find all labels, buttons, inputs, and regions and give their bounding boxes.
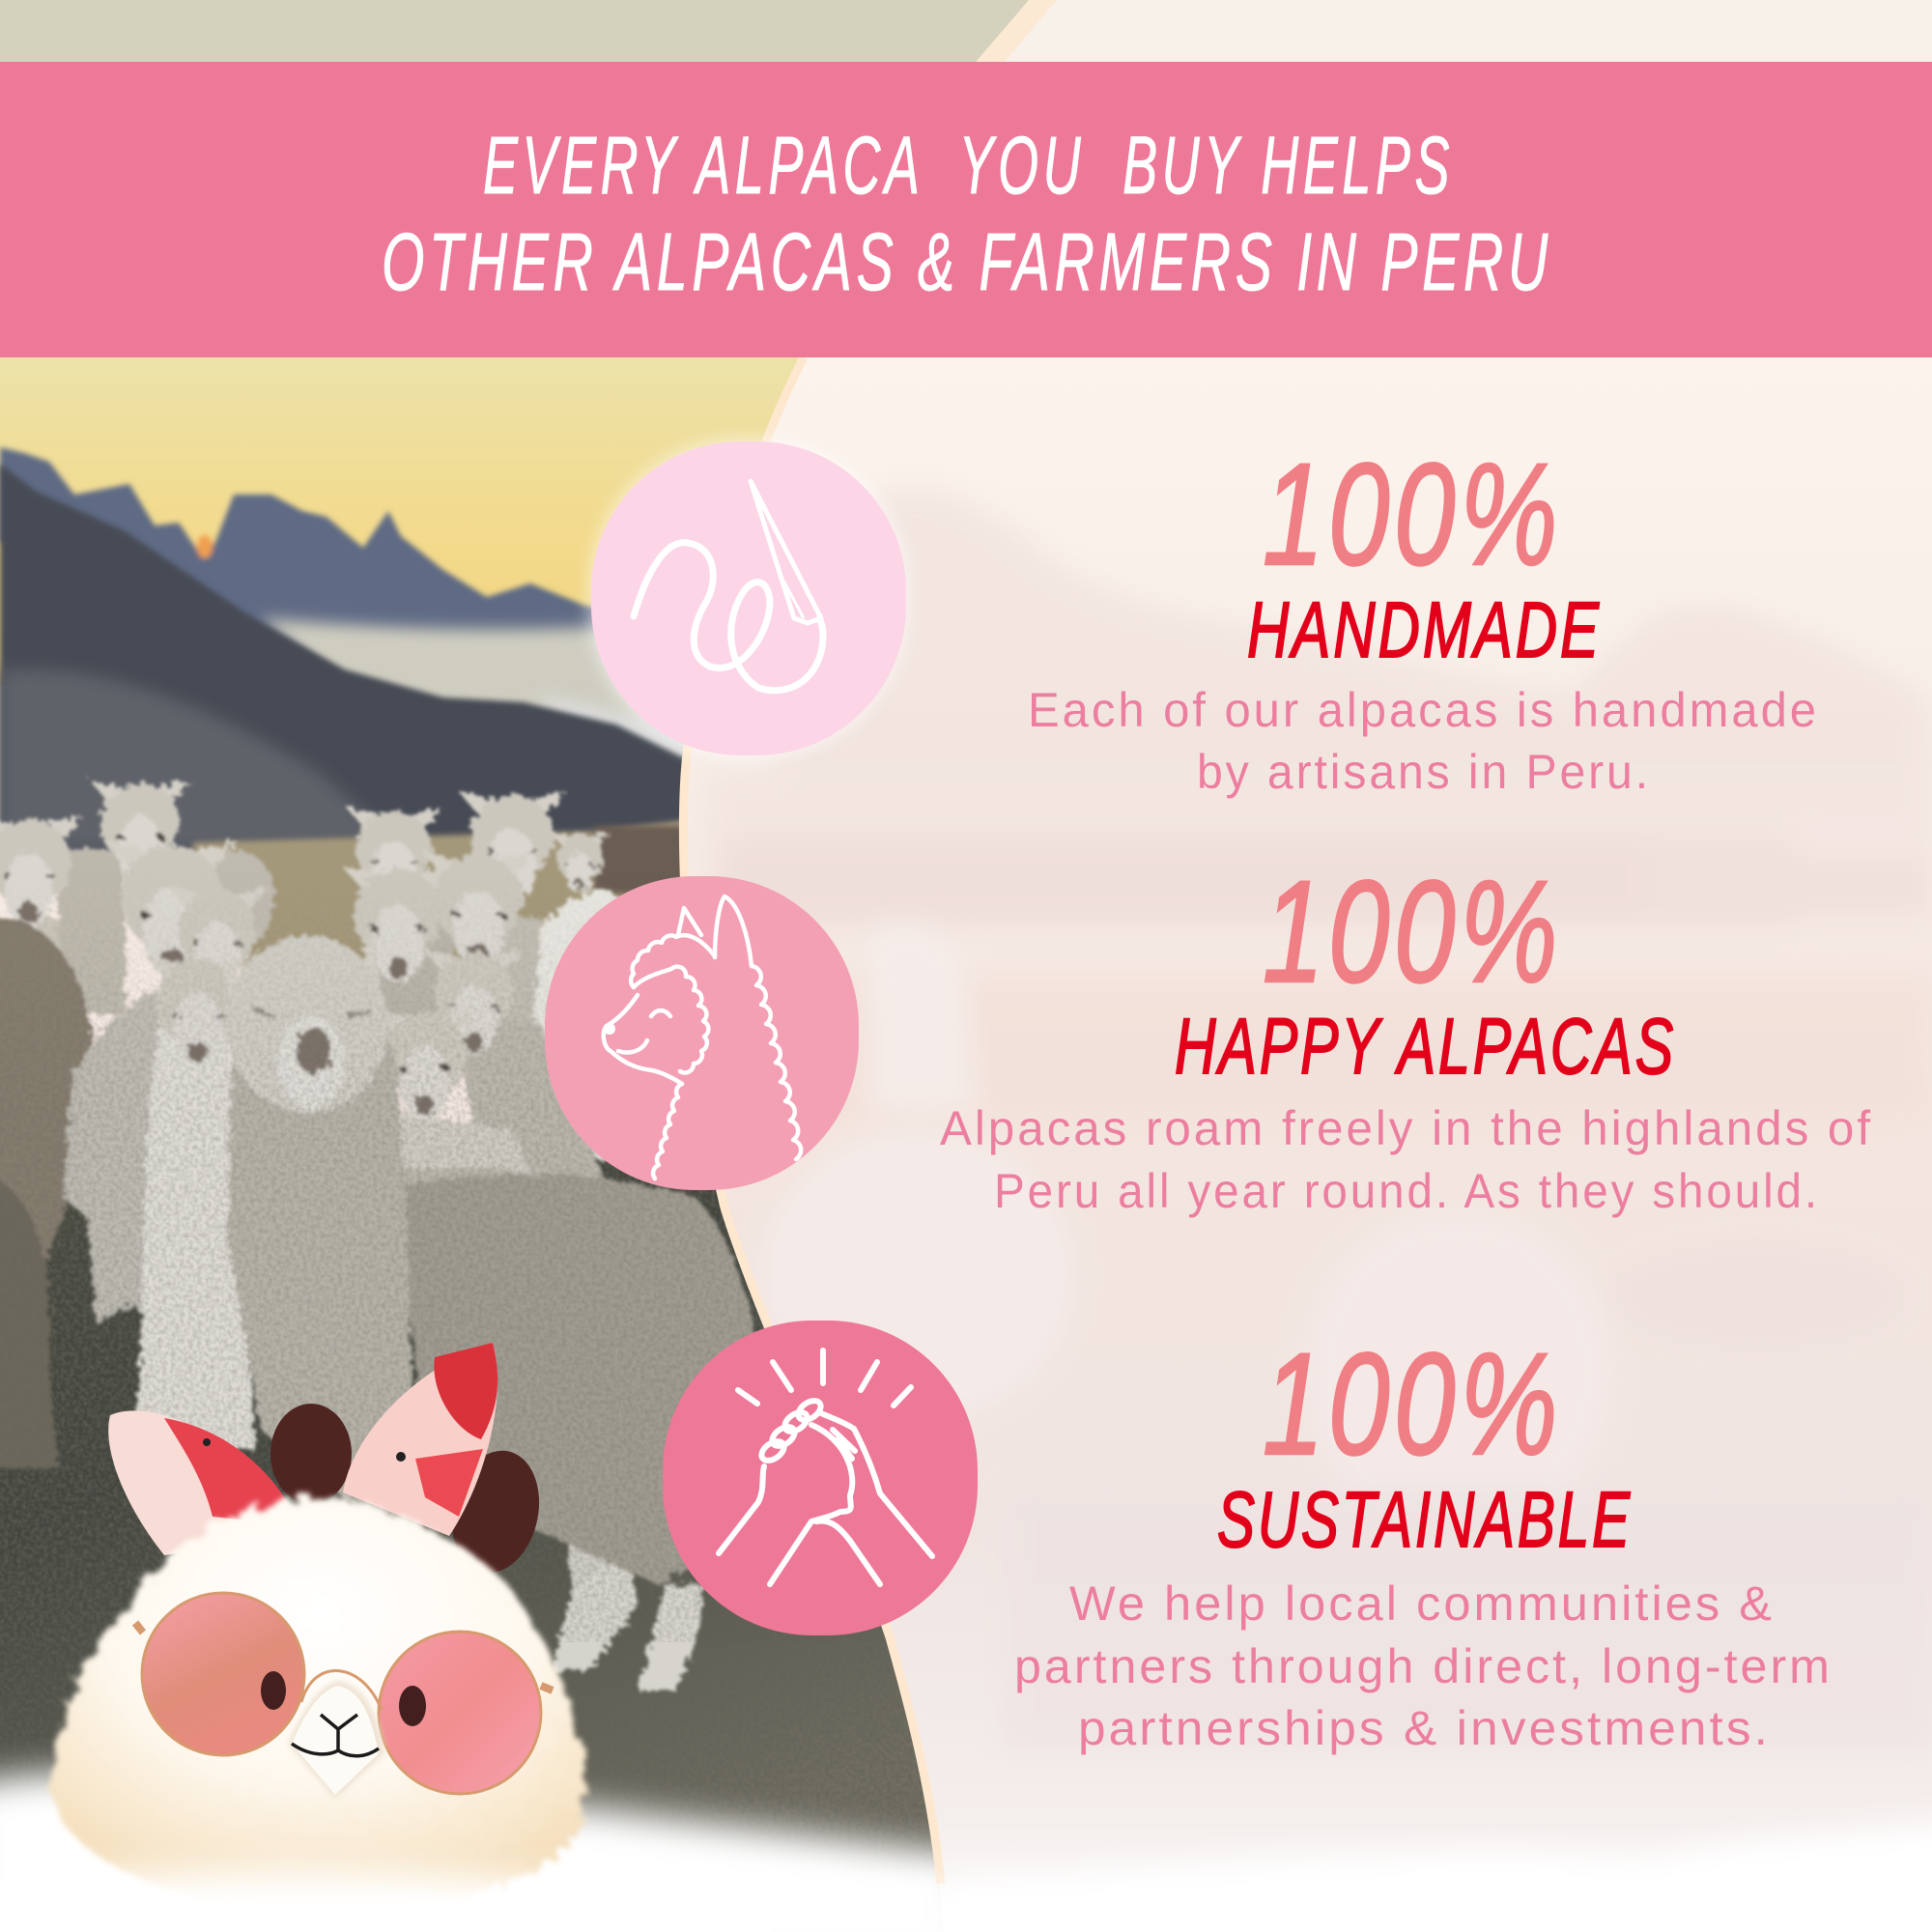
icon: happy alpaca badge <box>545 876 859 1190</box>
body text: Each of our alpacas is handmade <box>1028 683 1819 737</box>
body text: partnerships & investments. <box>1078 1701 1771 1755</box>
icon: needle and thread badge <box>591 441 906 755</box>
stat 100 percent: 100% <box>1263 1322 1562 1485</box>
dark ground <box>0 1140 966 1932</box>
tan pasture <box>193 816 715 966</box>
heading happy alpacas: HAPPY ALPACAS <box>1175 1003 1676 1091</box>
block: happy alpacas <box>940 850 1873 1218</box>
plush floral left ear <box>108 1410 304 1555</box>
plush brown back ears <box>270 1404 550 1581</box>
stat 100 percent: 100% <box>1263 850 1562 1012</box>
plush eyes <box>261 1671 426 1726</box>
plush fluffy body <box>53 1497 585 1915</box>
stat 100 percent: 100% <box>1263 433 1562 595</box>
heading handmade: HANDMADE <box>1247 586 1602 674</box>
heading sustainable: SUSTAINABLE <box>1217 1476 1633 1564</box>
block: sustainable <box>1014 1322 1833 1755</box>
plush bottom fade <box>0 1871 773 1932</box>
brown left alpaca <box>0 917 92 1275</box>
middle alpacas <box>63 840 609 1449</box>
cream curved divider <box>683 357 941 1884</box>
back row alpacas <box>0 780 628 1159</box>
block: handmade <box>1028 433 1819 799</box>
distant mountain range <box>0 444 594 649</box>
body text: Alpacas roam freely in the highlands of <box>940 1101 1873 1155</box>
plush alpaca with glasses <box>0 1343 773 1932</box>
header band <box>0 62 1932 357</box>
dark foreground hill <box>0 464 705 850</box>
body text: partners through direct, long-term <box>1014 1639 1833 1693</box>
body text: Peru all year round. As they should. <box>994 1164 1820 1218</box>
plush snout <box>288 1681 384 1799</box>
sky <box>0 357 799 686</box>
fleece grain texture <box>0 923 750 1642</box>
center alpaca <box>220 927 773 1690</box>
bottom fluffy white edge <box>927 1816 1932 1932</box>
body text: We help local communities & <box>1069 1577 1775 1631</box>
panel: alpaca herd photo <box>0 357 966 1932</box>
background top strip <box>0 0 1932 68</box>
cloud band <box>260 609 647 724</box>
white fleece ground fade <box>0 1773 966 1932</box>
icon: clasped hands badge <box>663 1321 978 1635</box>
round pink glasses <box>135 1593 553 1794</box>
body text: by artisans in Peru. <box>1197 745 1651 799</box>
plush floral right ear <box>343 1343 497 1536</box>
